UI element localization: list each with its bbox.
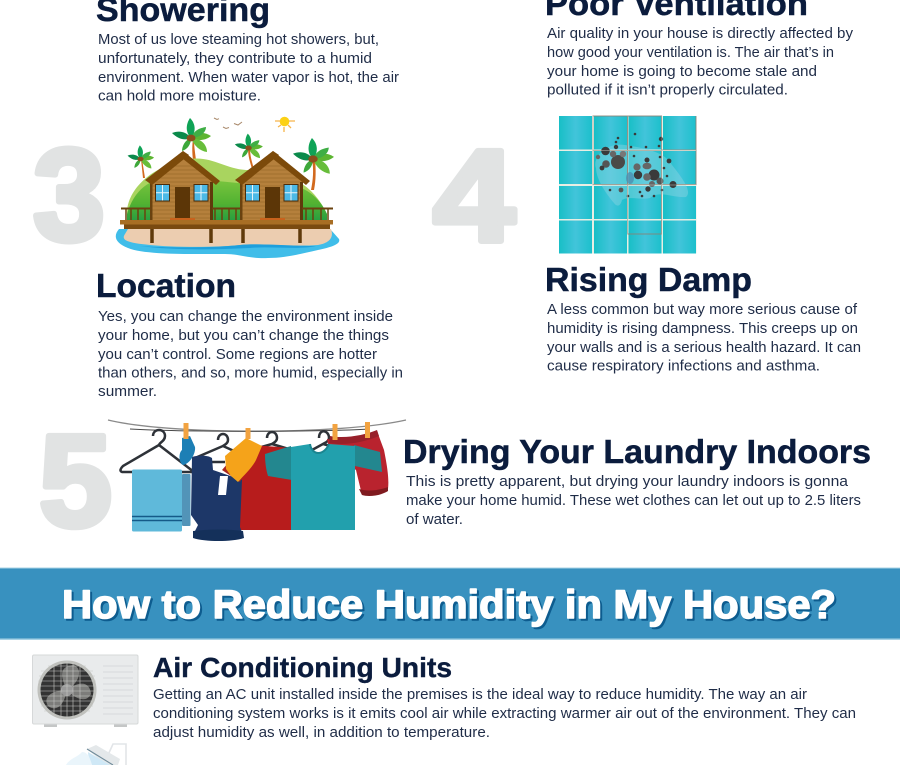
text block: drying your laundry indoors: of water. [406,512,463,528]
text block: showering: environment. When water vapor is hot, the air [98,70,399,86]
heading: rising damp: Rising Damp [545,261,752,298]
text block: showering [98,32,399,104]
text block: rising damp [547,302,861,374]
text block: location: than others, and so, more humid, especially in [98,366,403,382]
icon: dehumidifier partial [66,744,126,765]
text block: air conditioning units [153,687,856,741]
text block: drying your laundry indoors [406,474,861,528]
text block: showering: Most of us love steaming hot showers, but, [98,32,379,48]
heading: air conditioning units: Air Conditioning Units [153,652,452,683]
text block: location: Yes, you can change the environment inside [98,309,393,325]
number 5: 5 [39,407,112,554]
text block: rising damp: humidity is rising dampness. This creeps up on [547,321,858,337]
text block: location: summer. [98,384,157,400]
panel: rising damp [433,116,861,374]
panel: drying laundry indoors [39,407,871,554]
icon: island huts [116,117,339,258]
text block: location [98,309,403,400]
text block: poor ventilation: how good your ventilation is. The air that’s in [547,45,834,61]
icon: air conditioner outdoor unit [32,655,138,727]
text block: drying your laundry indoors: make your home humid. These wet clothes can let out up to 2.5 liters [406,493,861,509]
text block: rising damp: your walls and is a serious health hazard. It can [547,340,861,356]
text block: poor ventilation [547,26,854,98]
text block: rising damp: A less common but way more serious cause of [547,302,858,318]
number 4: 4 [433,122,515,269]
text block: poor ventilation: Air quality in your house is directly affected by [547,26,854,42]
text block: rising damp: cause respiratory infections and asthma. [547,358,820,374]
panel: showering [96,0,399,104]
banner title: How to Reduce Humidity in My House? [62,583,836,627]
text block: air conditioning units: adjust humidity as well, in addition to temperature. [153,725,490,741]
number 3: 3 [33,121,105,268]
panel: location [33,117,403,400]
heading: drying your laundry indoors: Drying Your Laundry Indoors [403,433,871,470]
text block: poor ventilation: polluted if it isn’t properly circulated. [547,82,788,98]
text block: showering: unfortunately, they contribute to a humid [98,51,372,67]
heading: location: Location [96,267,236,304]
text block: showering: can hold more moisture. [98,88,261,104]
text block: location: your home, but you can’t change the things [98,328,389,344]
banner [0,568,900,640]
icon: laundry on a line [108,420,406,541]
text block: drying your laundry indoors: This is pretty apparent, but drying your laundry indoors is gonna [406,474,849,490]
text block: poor ventilation: your home is going to become stale and [547,64,817,80]
text block: air conditioning units: Getting an AC unit installed inside the premises is the ideal way to reduce humidity. The way an air [153,687,807,703]
panel: air conditioning units [32,652,856,741]
text block: location: you can’t control. Some regions are hotter [98,347,377,363]
text block: air conditioning units: conditioning system works is it emits cool air while extracting warmer air out of the environment. They can [153,706,856,722]
icon: mouldy tiles [559,116,696,254]
panel: poor ventilation [545,0,854,98]
